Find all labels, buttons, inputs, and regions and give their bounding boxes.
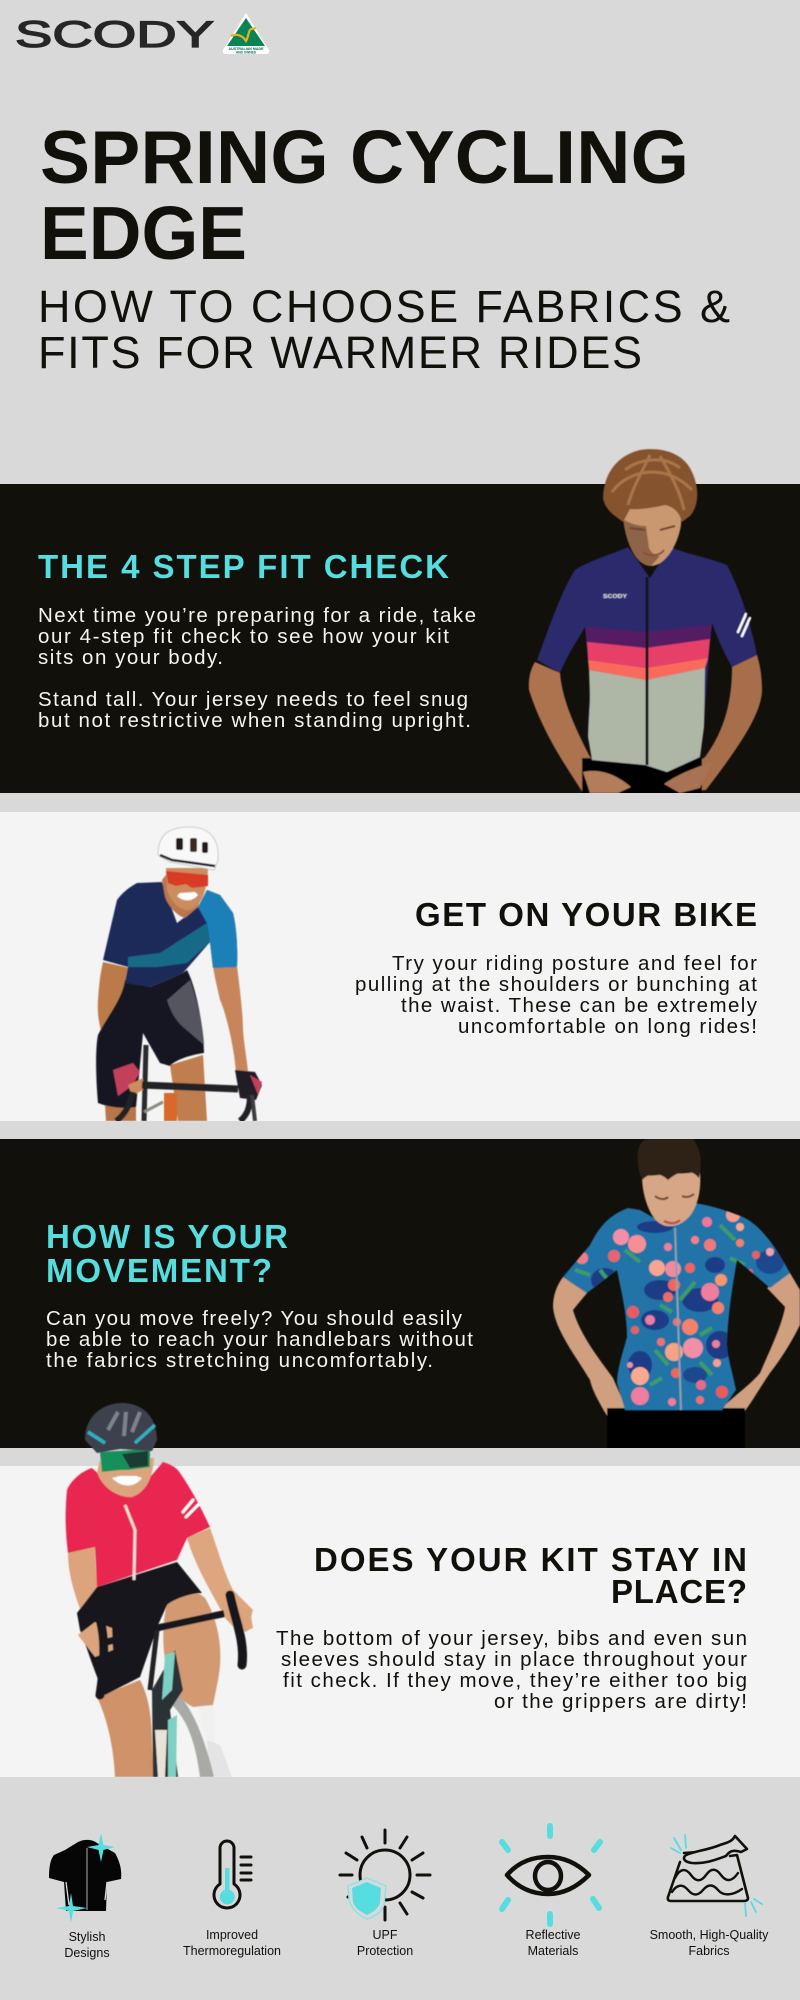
label: UPF protection — [357, 1928, 413, 1958]
label: smooth fabrics — [650, 1928, 769, 1958]
label: improved thermoregulation: Improved — [206, 1928, 258, 1942]
body text: fit check: Next time you’re preparing for a ride, take — [38, 604, 476, 627]
label: reflective materials: Reflective — [526, 1928, 580, 1942]
label: improved thermoregulation — [183, 1928, 281, 1958]
subtitle: HOW TO CHOOSE FABRICS & — [38, 281, 730, 332]
icon: stylish designs jersey — [49, 1833, 121, 1923]
icon: thermometer — [214, 1841, 251, 1908]
icon: Australian Made triangle: AND OWNED — [236, 50, 257, 54]
panel: get on your bike — [0, 812, 800, 1121]
photo: female cyclist in red jersey — [66, 1403, 253, 1777]
icon: UPF sun and shield — [340, 1830, 430, 1920]
title: EDGE — [40, 191, 247, 275]
body text: riding posture: the waist. These can be extremely — [401, 994, 758, 1017]
panel: how is your movement — [0, 1139, 800, 1450]
heading: how is your movement — [46, 1218, 288, 1289]
label: reflective materials: Materials — [528, 1944, 578, 1958]
label: improved thermoregulation: Thermoregulation — [183, 1944, 281, 1958]
heading: get on your bike: GET ON YOUR BIKE — [415, 896, 757, 933]
body text: riding posture — [355, 952, 758, 1038]
body text: riding posture: pulling at the shoulders or bunching at — [355, 973, 757, 996]
label: smooth fabrics: Fabrics — [689, 1944, 729, 1958]
label: UPF protection: UPF — [372, 1928, 398, 1942]
body text: move freely: the fabrics stretching uncomfortably. — [46, 1349, 433, 1372]
body text: fit check: Stand tall. Your jersey needs to feel snug — [38, 688, 468, 711]
subtitle — [38, 281, 730, 378]
body text: move freely: Can you move freely? You should easily — [46, 1307, 463, 1330]
heading: the 4 step fit check: THE 4 STEP FIT CHECK — [38, 548, 449, 585]
icon: reflective eye — [502, 1826, 600, 1924]
title: SPRING CYCLING — [40, 115, 689, 199]
body text: fit check: sits on your body. — [38, 646, 223, 669]
logo: Scody and Australian Made — [15, 13, 269, 55]
wordmark: SCODY — [15, 14, 214, 55]
body text: fit check: our 4-step fit check to see how your kit — [38, 625, 449, 648]
body text: grippers — [276, 1627, 747, 1713]
panel: the 4 step fit check — [0, 449, 800, 794]
icon: Australian Made triangle: AUSTRALIAN MADE — [229, 47, 264, 51]
title — [40, 115, 689, 275]
body text: move freely — [46, 1307, 473, 1372]
heading: how is your movement: MOVEMENT? — [46, 1252, 272, 1289]
body text: fit check: but not restrictive when standing upright. — [38, 709, 471, 732]
panel: does your kit stay in place — [0, 1403, 800, 1777]
icon row: features — [49, 1826, 769, 1960]
body text: grippers: fit check. If they move, they’re either too big — [283, 1669, 747, 1692]
photo: man checking jersey fit — [529, 449, 762, 794]
label: reflective materials — [526, 1928, 580, 1958]
body text: grippers: or the grippers are dirty! — [494, 1690, 747, 1713]
icon: Australian Made triangle — [223, 13, 269, 54]
body text: riding posture: Try your riding posture and feel for — [392, 952, 757, 975]
photo: man checking jersey fit: SCODY — [603, 594, 627, 600]
body text: fit check — [38, 604, 476, 732]
body text: grippers: The bottom of your jersey, bibs and even sun — [276, 1627, 747, 1650]
heading: how is your movement: HOW IS YOUR — [46, 1218, 288, 1255]
subtitle: FITS FOR WARMER RIDES — [38, 327, 642, 378]
label: UPF protection: Protection — [357, 1944, 413, 1958]
icon: smooth fabric with hand — [668, 1835, 762, 1916]
label: stylish designs — [64, 1930, 110, 1960]
photo: male cyclist on bike — [96, 827, 262, 1121]
label: stylish designs: Stylish — [69, 1930, 105, 1944]
body text: grippers: sleeves should stay in place throughout your — [281, 1648, 747, 1671]
heading: does your kit stay in place: DOES YOUR KIT STAY IN — [314, 1541, 747, 1578]
photo: woman in floral jersey — [553, 1139, 800, 1450]
body text: riding posture: uncomfortable on long rides! — [458, 1015, 757, 1038]
heading: does your kit stay in place: PLACE? — [611, 1573, 747, 1610]
heading: does your kit stay in place — [314, 1541, 747, 1610]
body text: move freely: be able to reach your handlebars without — [46, 1328, 473, 1351]
label: stylish designs: Designs — [64, 1946, 110, 1960]
label: smooth fabrics: Smooth, High-Quality — [650, 1928, 769, 1942]
